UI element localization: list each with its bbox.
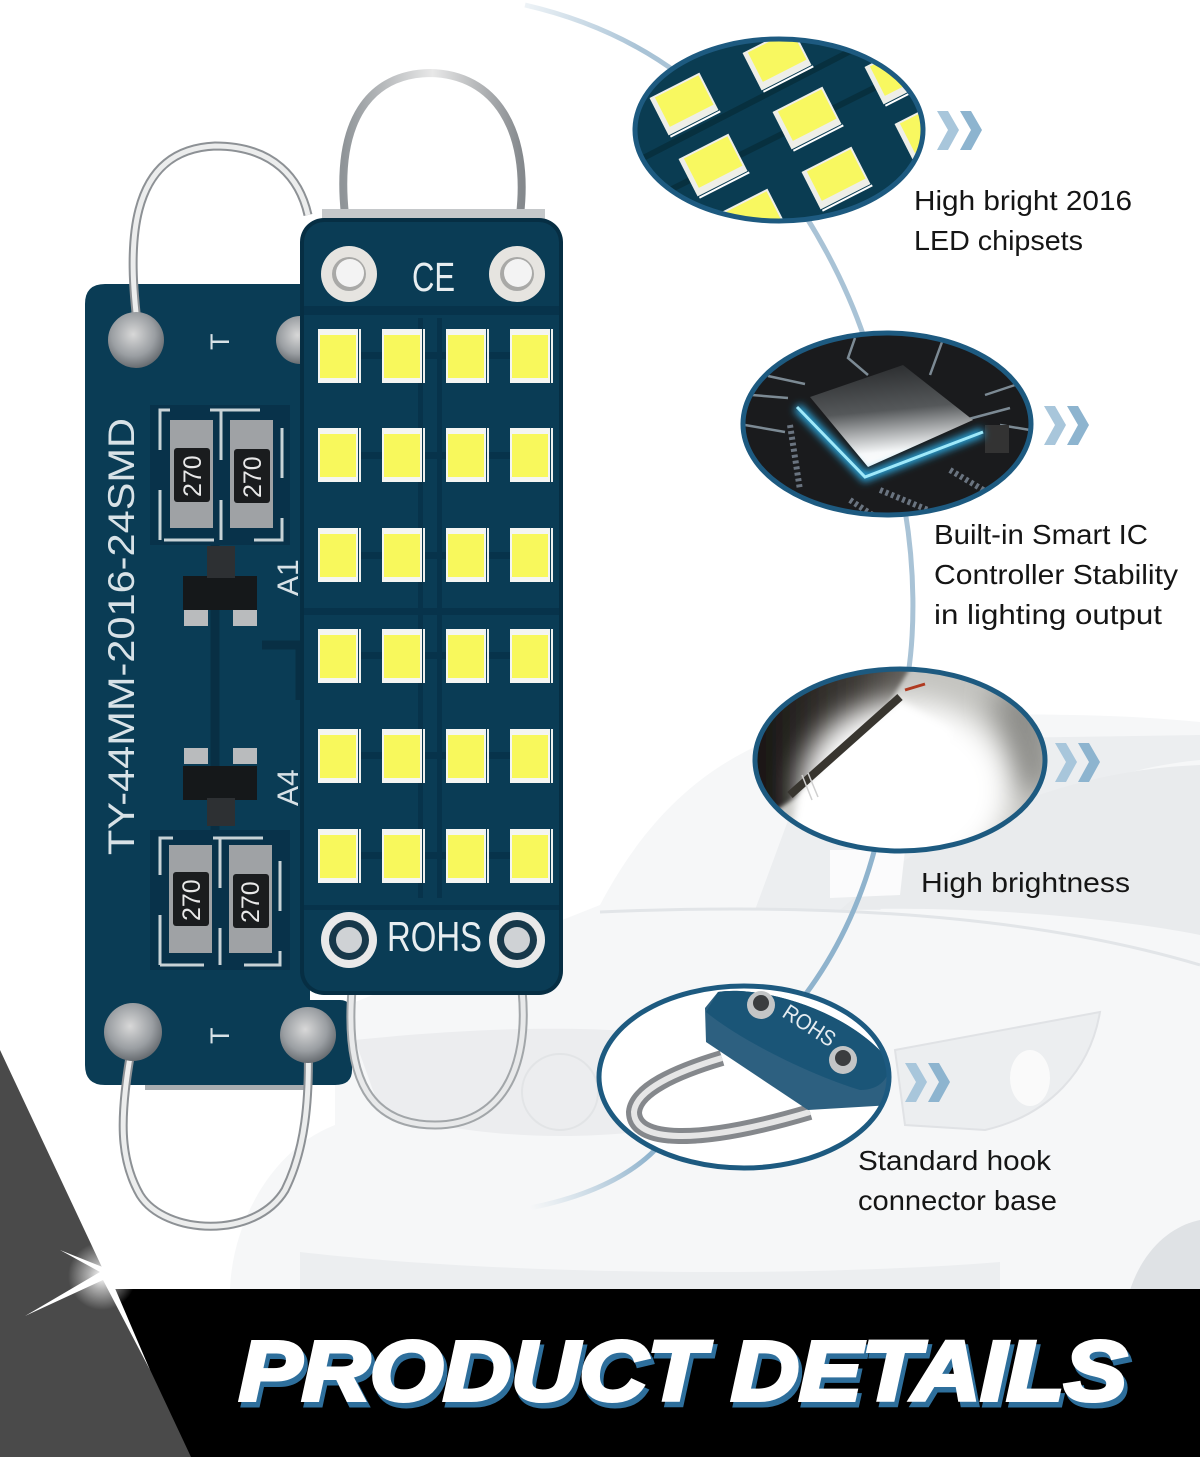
solder joints	[104, 312, 336, 1063]
caption 2: Built-in Smart IC	[934, 519, 1148, 550]
chevrons 2	[1044, 406, 1089, 445]
caption 2	[934, 519, 1178, 630]
connector plate	[705, 991, 892, 1110]
caption 1: High bright 2016	[914, 185, 1132, 216]
caption 2: in lighting output	[934, 599, 1162, 630]
labels T and component marks	[205, 334, 305, 1044]
labels T and component marks: A1	[272, 559, 305, 596]
title: PRODUCT DETAILS	[239, 1324, 1127, 1418]
caption 2: Controller Stability	[934, 559, 1178, 590]
labels T and component marks: T	[205, 334, 235, 350]
silkscreen label: TY-44MM-2016-24SMD	[101, 418, 142, 855]
detail 4: hook connector	[599, 986, 892, 1168]
detail 1: LED chipsets	[632, 36, 926, 224]
star sparkle	[25, 1235, 150, 1370]
resistors: 270	[237, 881, 265, 923]
caption 3: High brightness	[921, 867, 1130, 898]
front circuit board	[300, 209, 563, 995]
labels T and component marks: T	[205, 1028, 235, 1044]
ROHS mark: ROHS	[387, 913, 482, 960]
resistors: 270	[179, 455, 207, 497]
labels T and component marks: A4	[272, 769, 305, 806]
detail 2: smart IC	[741, 331, 1033, 520]
background: faint car	[230, 714, 1200, 1290]
rear circuit board	[85, 146, 352, 1226]
transistors	[183, 546, 257, 826]
title: PRODUCT DETAILS	[242, 1329, 1130, 1423]
caption 4: Standard hook	[858, 1145, 1052, 1176]
detail 3: high brightness	[752, 666, 1048, 854]
resistors	[169, 420, 273, 953]
mounting pads bottom	[321, 912, 545, 968]
caption 1: LED chipsets	[914, 225, 1083, 256]
title band	[0, 1289, 1200, 1457]
caption 1	[914, 185, 1132, 256]
rear hooks	[123, 146, 308, 1226]
steel hook	[634, 1058, 810, 1136]
caption 4	[858, 1145, 1057, 1216]
resistors: 270	[239, 456, 267, 498]
detail 4: hook connector: ROHS	[778, 999, 841, 1052]
connector curve	[525, 5, 913, 1208]
front hooks	[343, 73, 523, 1125]
chevrons 3	[1055, 743, 1100, 782]
resistors: 270	[178, 879, 206, 921]
caption 4: connector base	[858, 1185, 1057, 1216]
mounting pads top	[321, 246, 545, 302]
decorative grey wedge	[0, 1050, 191, 1457]
chevrons 4	[905, 1063, 950, 1102]
LED grid	[318, 329, 553, 883]
CE mark: CE	[412, 254, 455, 300]
chevrons 1	[937, 111, 982, 150]
